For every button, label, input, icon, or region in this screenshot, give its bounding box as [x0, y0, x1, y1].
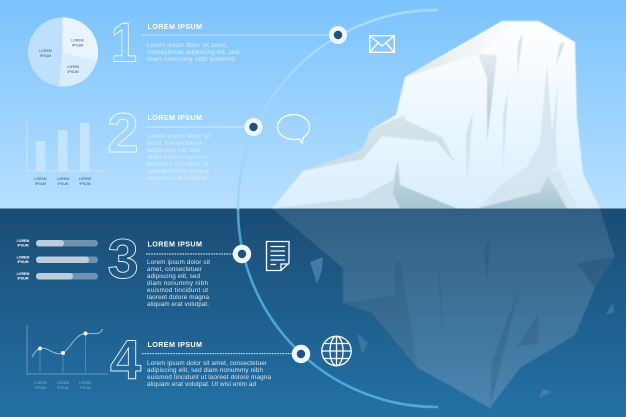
pie chart: LOREM: [39, 49, 52, 53]
line chart: LOREM: [79, 381, 91, 385]
step 3 text: LOREM IPSUM: [148, 240, 202, 248]
number 1: 1: [111, 10, 137, 74]
step 3 text: amet, consectetuer: [147, 266, 202, 273]
pie chart: IPSUM: [72, 44, 83, 48]
number 3: 3: [108, 227, 139, 290]
pie chart: LOREM: [67, 65, 79, 69]
iceberg above water: [272, 21, 600, 208]
step 2 text: LOREM IPSUM: [148, 113, 202, 122]
line chart: IPSUM: [35, 386, 46, 390]
step 3 connector: [146, 253, 234, 255]
bar chart: IPSUM: [35, 182, 46, 186]
step 4 node: [294, 347, 308, 361]
step 3 text: diam nonummy nibh: [147, 280, 208, 287]
icon: speech bubble: [278, 114, 310, 144]
progress bars: IPSUM: [17, 276, 29, 280]
line chart: IPSUM: [57, 386, 69, 390]
line chart: LOREM: [34, 381, 47, 385]
bar chart: IPSUM: [57, 182, 69, 186]
step 1 text: diam nonummy nibh euismod: [147, 56, 235, 63]
step 3 text: aliquam erat volutpat.: [147, 301, 209, 308]
progress bars: [17, 239, 98, 280]
pie chart: [28, 17, 98, 87]
progress bars: LOREM: [17, 272, 29, 276]
step 3 node: [235, 247, 249, 261]
step 3 text: laoreet dolore magna: [147, 294, 209, 301]
step 4 text: euismod tincidunt ut laoreet dolore magna: [147, 374, 271, 381]
bar chart: LOREM: [79, 177, 91, 181]
ice shard 4: [539, 389, 552, 398]
number 2: 2: [108, 101, 139, 164]
pie chart: IPSUM: [40, 54, 51, 58]
bar chart: LOREM: [34, 177, 47, 181]
bar chart: LOREM: [57, 177, 69, 181]
step 1 text: LOREM IPSUM: [148, 22, 202, 31]
step 2 text: laoreet dolore magna: [147, 168, 209, 175]
iceberg below water: [273, 209, 615, 408]
step 2 text: Lorem ipsum dolor sit: [147, 133, 210, 140]
step 2 text: euismod tincidunt ut: [147, 161, 208, 168]
line chart: [27, 325, 108, 390]
ice shard 2: [357, 333, 368, 354]
progress bars: IPSUM: [17, 260, 29, 264]
number 4: 4: [110, 328, 141, 391]
step 4 connector: [142, 353, 293, 355]
ice shard 3: [606, 303, 614, 314]
step 1 text: Lorem ipsum dolor sit amet,: [147, 42, 227, 49]
step 2 text: diam nonummy nibh: [147, 154, 208, 161]
progress bars: IPSUM: [17, 244, 29, 248]
icon: document: [266, 242, 289, 270]
step 2 text: adipiscing elit, sed: [147, 147, 200, 154]
progress bars: LOREM: [17, 239, 29, 243]
step 1 text: consectetuer adipiscing elit, sed: [147, 49, 239, 56]
step 3 text: Lorem ipsum dolor sit: [147, 259, 210, 266]
step 2 text: aliquam erat volutpat.: [147, 175, 209, 182]
step 4 text: [147, 340, 271, 388]
step 2 text: [147, 113, 210, 182]
icon: envelope: [370, 36, 394, 52]
bar chart: [27, 121, 108, 186]
step 1 text: [147, 22, 239, 63]
pie chart: IPSUM: [67, 70, 79, 74]
pie chart: LOREM: [71, 38, 84, 42]
step 2 connector: [146, 126, 246, 128]
arc connecting the steps: [238, 10, 437, 407]
line chart: IPSUM: [79, 386, 91, 390]
step 3 text: euismod tincidunt ut: [147, 287, 208, 294]
line chart: LOREM: [57, 381, 69, 385]
step 1 connector: [142, 34, 331, 36]
step 3 text: adipiscing elit, sed: [147, 273, 200, 280]
step 4 text: Lorem ipsum dolor sit amet, consectetuer: [147, 360, 267, 367]
step 2 text: amet, consectetuer: [147, 140, 202, 147]
step 4 text: LOREM IPSUM: [148, 340, 202, 349]
step 2 node: [244, 118, 262, 136]
step 4 text: aliquam erat volutpat. Ut wisi enim ad: [147, 381, 256, 388]
ice shard 1: [310, 257, 323, 284]
panel: sky background: [0, 0, 626, 208]
progress bars: LOREM: [17, 256, 29, 260]
icon: globe: [322, 336, 351, 366]
step 3 text: [147, 240, 210, 308]
bar chart: IPSUM: [79, 182, 91, 186]
step 1 node: [329, 26, 347, 44]
step 4 text: adipiscing elit, sed diam nonummy nibh: [147, 367, 263, 374]
panel: sea background: [0, 208, 626, 417]
